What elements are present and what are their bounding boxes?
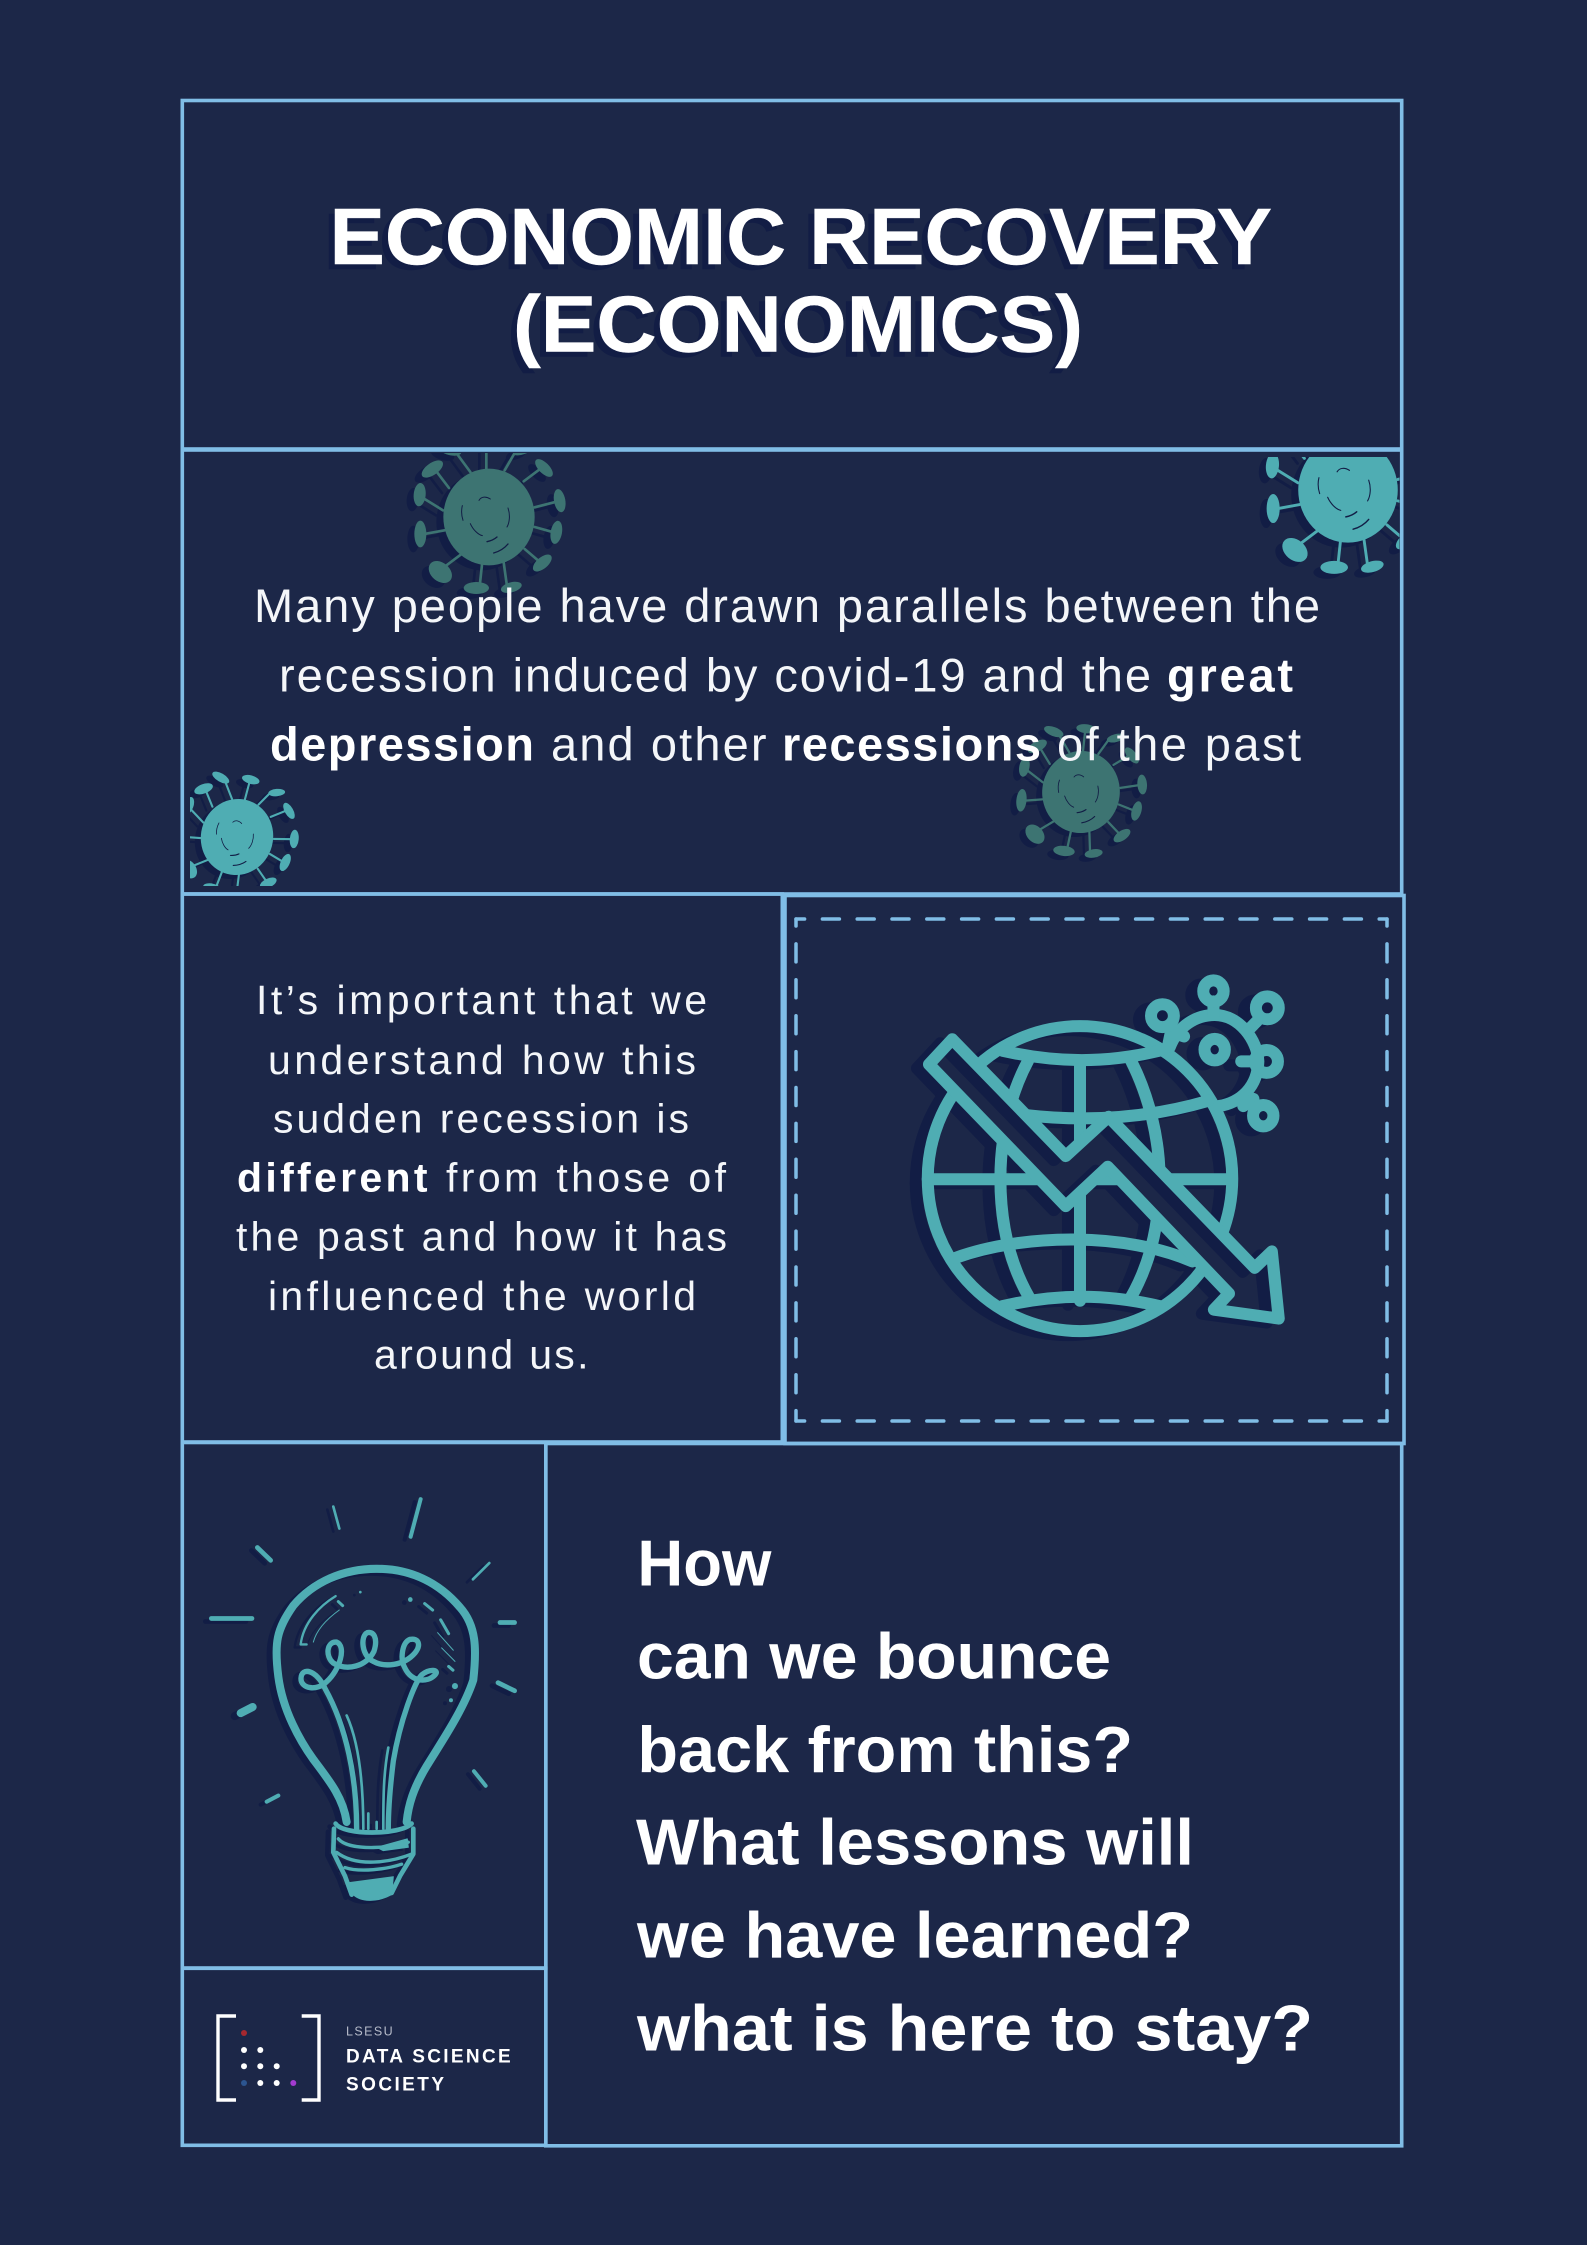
panel: title frame — [182, 100, 1402, 449]
text block: closing questions: back from this? — [637, 1713, 1133, 1786]
icon: virus top right — [1259, 457, 1400, 578]
text block: how this recession differs: sudden recession is — [273, 1096, 689, 1142]
text block: how this recession differs: from those of — [446, 1155, 727, 1201]
panel: logo frame — [182, 1968, 546, 2145]
text block: how this recession differs: influenced the world — [268, 1273, 696, 1319]
text block: how this recession differs — [236, 977, 727, 1378]
panel: introduction frame — [182, 450, 1402, 894]
logo: LSESU Data Science Society: DATA SCIENCE — [346, 2047, 511, 2068]
text block: how this recession differs: around us. — [374, 1332, 588, 1378]
panel: globe icon frame — [785, 896, 1404, 1444]
logo: LSESU Data Science Society: SOCIETY — [346, 2075, 444, 2096]
text block: how this recession differs: It’s important that we — [256, 977, 707, 1023]
text block: closing questions: How — [637, 1527, 772, 1600]
title — [330, 192, 1272, 368]
dashed inner frame — [796, 919, 1387, 1421]
text block: closing questions: we have learned? — [636, 1898, 1193, 1972]
panel: comparison text frame — [182, 894, 782, 1442]
text block: introduction: depression — [270, 718, 534, 770]
text block: introduction: recessions — [782, 718, 1041, 770]
text block: introduction — [254, 579, 1320, 770]
icon: virus top centre — [413, 437, 567, 595]
text block: introduction: and other — [551, 718, 766, 770]
icon: light bulb — [211, 1499, 515, 1900]
panel: light bulb frame — [182, 1442, 546, 1968]
text block: introduction: Many people have drawn parallels between the — [254, 579, 1320, 632]
text block: closing questions: What lessons will — [636, 1806, 1194, 1879]
title: ECONOMIC RECOVERY — [330, 192, 1272, 281]
text block: introduction: of the past — [1057, 718, 1301, 770]
logo mark: brackets and dots — [218, 2016, 319, 2100]
text block: introduction: recession induced by covid-19 and the — [279, 648, 1151, 702]
text block: how this recession differs: the past and how it has — [236, 1214, 727, 1260]
title: (ECONOMICS) — [513, 280, 1083, 368]
text block: closing questions: what is here to stay? — [636, 1991, 1313, 2064]
icon: globe with falling arrow and virus — [917, 980, 1279, 1331]
panel: questions frame — [546, 1444, 1402, 2146]
text block: how this recession differs: different — [237, 1155, 428, 1201]
icon: virus behind text — [1010, 718, 1154, 865]
text block: closing questions — [636, 1527, 1313, 2064]
text block: closing questions: can we bounce — [637, 1620, 1111, 1693]
text block: how this recession differs: understand how this — [268, 1037, 696, 1083]
logo: LSESU Data Science Society: LSESU — [346, 2025, 393, 2039]
icon: virus bottom left — [190, 772, 299, 886]
logo: LSESU Data Science Society — [218, 2016, 511, 2100]
text block: introduction: great — [1167, 648, 1293, 702]
